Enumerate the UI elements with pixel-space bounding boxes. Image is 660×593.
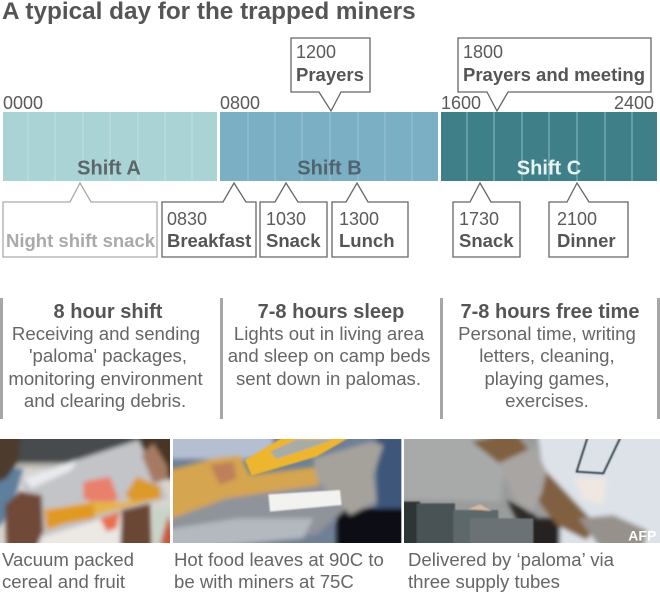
text block: 8 hour shift [8,301,203,411]
callout: 1030 snack: 1030 [266,209,306,229]
text block: 8 hour shift: 8 hour shift [54,301,163,323]
photo: vacuum packed food [0,439,170,543]
callout: 1800 prayers and meeting: 1800 [463,42,503,62]
captions: Delivered by ‘paloma’ via [408,549,615,570]
shift B band [220,112,438,181]
text block: 7-8 hours free time [458,301,639,411]
text block: 7-8 hours free time: 7-8 hours free time [461,301,639,323]
callout: night shift snack [3,183,157,257]
text block: 7-8 hours free time: Personal time, writing [458,323,636,344]
time labels: 0800 [220,93,260,113]
photo: hot food with thermometer [173,439,402,543]
callout: 1200 prayers [291,38,370,111]
callout: 1200 prayers: Prayers [296,64,364,85]
credit: AFP [628,527,656,543]
text block: 8 hour shift: 'paloma' packages, [29,345,187,366]
text block: 8 hour shift: Receiving and sending [12,323,200,344]
callout: 0830 breakfast [162,183,256,257]
callout: 2100 dinner [549,183,628,257]
text block: 8 hour shift: and clearing debris. [24,390,186,411]
callout: 1800 prayers and meeting [458,38,651,111]
text block: 7-8 hours sleep: 7-8 hours sleep [258,301,404,323]
callout: 1030 snack [260,183,327,257]
callout: 1730 snack: 1730 [459,209,499,229]
captions: Vacuum packed [2,549,134,570]
callout: 0830 breakfast: Breakfast [167,230,251,251]
callout: 1300 lunch: Lunch [339,230,394,251]
time labels: 1600 [441,93,481,113]
callout: night shift snack: Night shift snack [6,230,156,251]
photo: paloma supply tubes [404,439,660,543]
callout: 2100 dinner: 2100 [557,209,597,229]
time labels: 0000 [3,93,43,113]
callout: 2100 dinner: Dinner [557,230,616,251]
callout: 1800 prayers and meeting: Prayers and meeting [463,64,645,85]
text block: 7-8 hours sleep [228,301,430,389]
text block: 8 hour shift: monitoring environment [8,368,203,389]
column dividers [2,298,658,419]
callout: 1730 snack [453,183,520,257]
text block: 7-8 hours sleep: sent down in palomas. [236,368,421,389]
captions: be with miners at 75C [174,571,354,592]
shift C band [441,112,657,181]
shift B band: Shift B [297,158,362,180]
time labels: 2400 [614,93,654,113]
shift A band [3,112,217,181]
timeline bar [3,112,657,181]
shift C band: Shift C [517,158,581,180]
callout: 1730 snack: Snack [459,230,514,251]
callout: 1200 prayers: 1200 [296,42,336,62]
text block: 7-8 hours sleep: and sleep on camp beds [228,345,430,366]
text block: 7-8 hours sleep: Lights out in living area [234,323,425,344]
captions: Hot food leaves at 90C to [174,549,384,570]
captions: three supply tubes [408,571,560,592]
text block: 7-8 hours free time: exercises. [505,390,589,411]
callout: 0830 breakfast: 0830 [167,209,207,229]
callout: 1030 snack: Snack [266,230,321,251]
text block: 7-8 hours free time: letters, cleaning, [479,345,615,366]
captions: cereal and fruit [2,571,126,592]
time labels [3,93,654,113]
shift A band: Shift A [77,158,141,180]
text block: 7-8 hours free time: playing games, [484,368,610,389]
captions [2,549,615,592]
callout: 1300 lunch: 1300 [339,209,379,229]
callout: 1300 lunch [332,183,408,257]
